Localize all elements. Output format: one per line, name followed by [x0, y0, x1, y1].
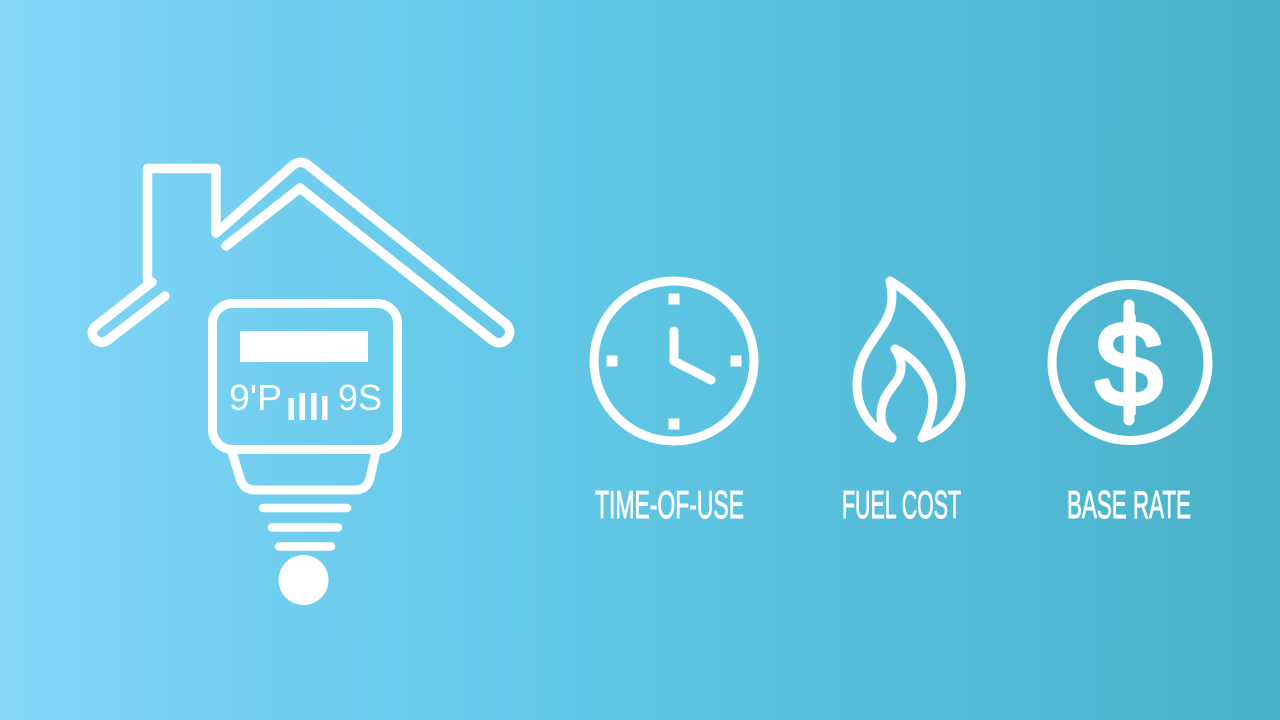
label: time-of-use: TIME-OF-USE [595, 484, 744, 527]
meter base [232, 452, 376, 490]
meter bulb dot [278, 555, 328, 605]
clock hour marks [606, 294, 742, 430]
meter body [212, 304, 398, 450]
label: fuel cost: FUEL COST [842, 484, 961, 527]
icon: dollar coin [1052, 284, 1208, 440]
icon: flame [857, 281, 961, 438]
icon: clock [594, 281, 754, 441]
icon: electric meter [212, 304, 398, 605]
icon: house roof with chimney [92, 162, 510, 343]
dollar bar [1124, 305, 1134, 420]
meter left reading: 9'P [229, 377, 282, 418]
meter right reading: 9S [338, 377, 382, 418]
dollar sign: $ [1096, 297, 1162, 431]
label: base rate: BASE RATE [1067, 484, 1191, 527]
meter display [240, 331, 368, 362]
clock hands [674, 331, 711, 380]
meter base lines [263, 508, 347, 546]
meter signal bars [288, 393, 328, 420]
